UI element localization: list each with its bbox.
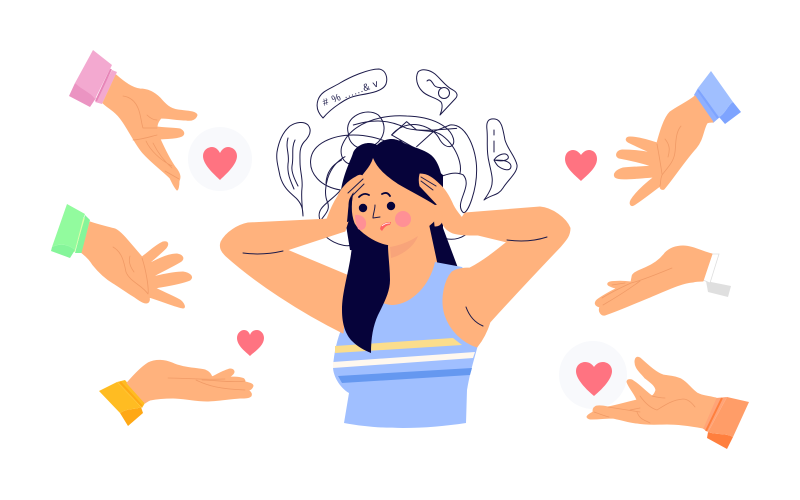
left arm: [220, 215, 350, 333]
left blush: [355, 215, 366, 230]
white stripe: [333, 352, 475, 368]
left hand on head: [327, 175, 364, 234]
top hair: [340, 139, 443, 225]
thought bubble: left wavy: [277, 122, 310, 216]
hand: green cuff: [51, 204, 192, 308]
back hair: [342, 140, 458, 268]
heart: lower left: [237, 330, 264, 356]
eyebrows: [359, 193, 390, 197]
thought bubble: squiggle and circle: [417, 70, 457, 115]
nose: [373, 205, 380, 218]
yellow stripe: [335, 338, 462, 353]
heart: upper right: [565, 150, 597, 181]
ear: [433, 204, 443, 226]
tank top: [333, 262, 480, 428]
mouth: [380, 222, 391, 231]
finger creases: [348, 177, 436, 197]
blue stripe: [338, 368, 472, 383]
right blush: [395, 211, 411, 227]
hand: blue cuff: [614, 71, 741, 206]
heart badge: top left: [188, 127, 252, 191]
long hair strand: [342, 245, 390, 353]
right eye: [387, 202, 395, 210]
thought bubble: right with petals: [484, 119, 517, 200]
left eye: [359, 204, 367, 212]
face: [352, 158, 437, 245]
hand: white cuff: [595, 246, 731, 315]
right arm: [443, 207, 570, 347]
neck and chest: [370, 222, 437, 306]
hand: yellow cuff: [99, 360, 253, 426]
neck shadow: [390, 236, 418, 258]
right hand on head: [419, 174, 478, 235]
heart badge: lower right: [559, 341, 627, 409]
scribble thought tangle: [311, 112, 477, 246]
woman: [220, 139, 570, 428]
hand: orange cuff: [587, 357, 749, 449]
right arm crease: [507, 237, 547, 241]
hand: pink cuff: [69, 50, 197, 190]
bubble text: # % ......& v: [321, 78, 380, 109]
armpit crease: [466, 307, 483, 326]
left arm crease: [243, 251, 283, 254]
speech bubble: symbols: [317, 69, 387, 118]
